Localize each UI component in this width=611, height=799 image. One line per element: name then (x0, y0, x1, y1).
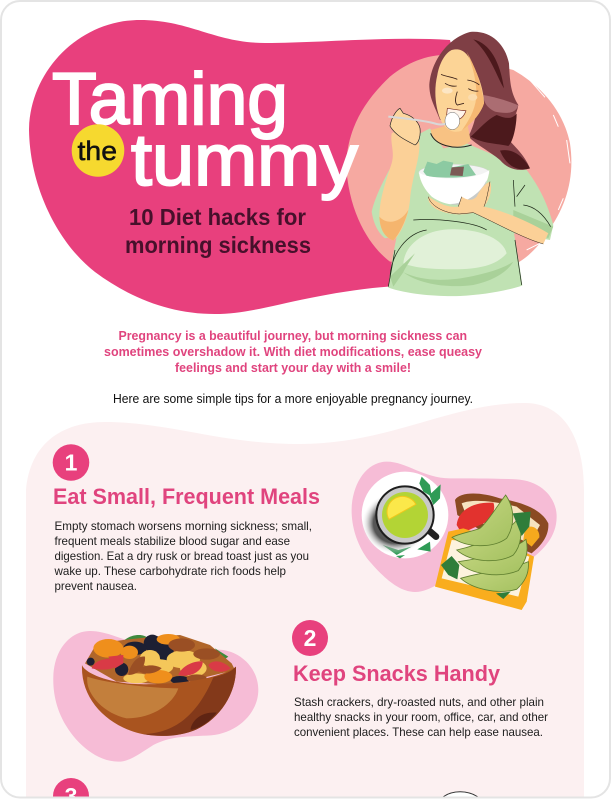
mint leaves (383, 477, 441, 555)
lead-in sentence: Here are some simple tips for a more enjoyable pregnancy journey. (113, 392, 473, 406)
collar line (431, 133, 472, 147)
lemon slice (387, 496, 416, 519)
pink blob (53, 631, 258, 762)
dried apricots (93, 634, 180, 659)
cup rim (376, 486, 434, 544)
tip 2 body (294, 695, 548, 739)
lower mint leaf (396, 555, 405, 558)
egg yolk (523, 527, 539, 547)
hero pink blob (29, 20, 470, 314)
tip 1 body: Empty stomach worsens morning sickness; small, (54, 519, 312, 533)
dark berries (87, 635, 189, 684)
tip 1 illustration: green tea and avocado toast (352, 462, 557, 610)
tip 1 body: prevent nausea. (54, 579, 137, 593)
belly highlight (403, 229, 507, 269)
face shade (462, 52, 484, 131)
bowl dark spot (191, 713, 217, 730)
saucer (362, 472, 448, 558)
tip 1 number badge: 1 (65, 450, 78, 476)
arm and shirt lines (388, 180, 551, 287)
tips panel background (26, 403, 584, 799)
tip 2 heading: Keep Snacks Handy (293, 661, 501, 686)
tip 1 heading: Eat Small, Frequent Meals (53, 484, 320, 509)
hair dark strands (471, 39, 530, 169)
hair back (429, 32, 530, 170)
bowl inside (418, 164, 490, 178)
pink blob (352, 462, 557, 592)
tip 2 illustration: fruit and nut bowl (53, 631, 258, 762)
intro paragraph: sometimes overshadow it. With diet modifications, ease queasy (104, 344, 483, 359)
cup handle (428, 530, 436, 537)
intro paragraph: Pregnancy is a beautiful journey, but morning sickness can (118, 328, 467, 343)
title: tummy: tummy (131, 120, 359, 201)
tip 1 body: wake up. These carbohydrate rich foods help (54, 564, 286, 578)
toast front crumb (442, 540, 529, 597)
left arm shade (379, 210, 408, 241)
skin: left arm (379, 127, 419, 241)
cheeks (442, 88, 453, 94)
avocado fan (452, 495, 528, 591)
badge: the: the (78, 136, 117, 166)
brush marks (527, 78, 570, 250)
subtitle (125, 204, 311, 258)
bowl (419, 170, 489, 204)
cup shadow (362, 493, 428, 554)
skin: hand holding spoon (390, 108, 420, 145)
title: Taming: Taming (52, 59, 288, 140)
golden fruit (123, 650, 207, 683)
arm outline (428, 182, 543, 244)
intro paragraph: feelings and start your day with a smile! (175, 360, 411, 375)
belly shading (390, 253, 513, 287)
spoon (388, 117, 450, 124)
salmon brush blob (346, 55, 571, 268)
green shirt (372, 128, 553, 296)
hair highlight (483, 95, 518, 113)
hero illustration: pregnant woman eating (346, 32, 571, 296)
cheek right (468, 94, 477, 101)
tip 1 body (54, 519, 312, 593)
eyes and brows (441, 74, 479, 105)
subtitle: 10 Diet hacks for (129, 204, 306, 230)
tip 2 body: convenient places. These can help ease nausea. (294, 725, 543, 739)
bowl right shade (143, 667, 236, 736)
intro paragraph (104, 328, 483, 375)
tip 2 number badge: 2 (304, 625, 316, 651)
neck (430, 126, 470, 147)
tip 2 body: healthy snacks in your room, office, car, and other (294, 710, 548, 724)
badge: the (72, 124, 124, 177)
toast back crumb (462, 501, 540, 543)
tip 2 body: Stash crackers, dry-roasted nuts, and other plain (294, 695, 544, 709)
tip 1 body: digestion. Eat a dry rusk or bread toast just as you (54, 549, 309, 563)
leaves (121, 635, 228, 662)
toast front (435, 528, 534, 610)
food on spoon (445, 112, 460, 130)
tip 2 number badge (292, 620, 328, 656)
tip 1 number badge (53, 444, 89, 481)
green tea (382, 492, 428, 538)
salad greens (423, 161, 476, 178)
mouth (447, 108, 466, 120)
strawberries (92, 655, 231, 676)
almonds and figs (128, 638, 220, 682)
toast back crust (455, 494, 548, 553)
bowl (82, 665, 236, 736)
tip 3 number badge (53, 778, 89, 799)
right arm and hand (428, 182, 548, 244)
right sleeve fold (513, 210, 553, 238)
parsley (441, 512, 531, 599)
bowl shading (450, 180, 487, 205)
bowl left highlight (87, 677, 178, 718)
tip 1 body: frequent meals stabilize blood sugar and ease (54, 534, 290, 548)
subtitle: morning sickness (125, 232, 311, 258)
face (435, 49, 484, 132)
toppings base (85, 635, 235, 685)
tomato (457, 503, 494, 533)
orange slice (144, 670, 172, 683)
food in bowl (450, 167, 464, 176)
tip 3 illustration top (443, 792, 478, 797)
